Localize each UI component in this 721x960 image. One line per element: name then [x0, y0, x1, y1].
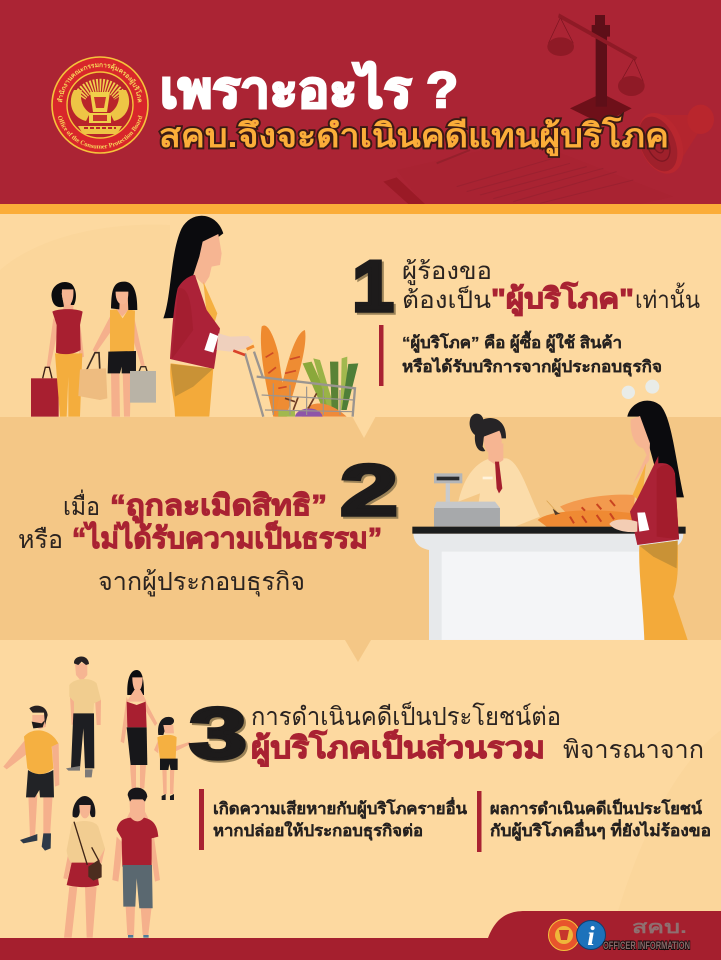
logo: Office of the Consumer Protection Board seal — [51, 56, 149, 154]
heading 1 — [402, 258, 700, 316]
illustration: shoppers with bags — [31, 216, 358, 417]
child — [154, 717, 191, 800]
text: definition of consumer: หรือได้รับบริการจากผู้ประกอบธุรกิจ — [402, 357, 662, 378]
heading 3: การดำเนินคดีเป็นประโยชน์ต่อ — [251, 701, 561, 731]
heading 3: พิจารณาจาก — [563, 736, 704, 764]
logo: Office of the Consumer Protection Board seal: สำนักงานคณะกรรมการคุ้มครองผู้บริโภค — [57, 63, 142, 102]
cash register — [434, 473, 500, 527]
footer logo: information icon: i — [587, 921, 595, 951]
text: section 2 — [18, 489, 382, 597]
illustration: group of consumers — [3, 657, 191, 938]
text: benefit to other consumers — [490, 797, 711, 842]
text: definition of consumer — [402, 330, 662, 378]
shopper with cart — [163, 216, 253, 417]
documents — [383, 140, 673, 204]
man in red t-shirt and grey shorts — [112, 788, 160, 938]
divider bar right — [477, 791, 482, 852]
damaged bread on counter — [538, 495, 637, 527]
text: benefit to other consumers: กับผู้บริโภคอื่นๆ ที่ยังไม่ร้องขอ — [490, 819, 711, 842]
divider bar left — [199, 789, 204, 850]
shopper in red shirt — [31, 282, 84, 417]
illustration: cashier counter scene — [412, 380, 688, 640]
footer logo: seal — [548, 920, 580, 950]
text: benefit to other consumers: ผลการดำเนินคดีเป็นประโยชน์ — [490, 797, 702, 818]
heading 1: "ผู้บริโภค" — [491, 281, 634, 316]
heading 3 — [251, 701, 704, 767]
logo: Office of the Consumer Protection Board seal: Office of the Consumer Protection Board — [58, 115, 142, 149]
pointer: section 2 to 3 — [345, 640, 371, 662]
text: harm to other consumers — [213, 797, 467, 841]
heading 1: ผู้ร้องขอ — [402, 258, 492, 286]
footer logo: information icon — [576, 920, 606, 951]
footer band — [0, 911, 721, 960]
text: harm to other consumers: เกิดความเสียหายกับผู้บริโภครายอื่น — [213, 797, 467, 820]
upset customer — [609, 380, 688, 640]
icon: scales of justice — [547, 13, 645, 124]
footer label: agency abbreviation: สคบ. — [632, 917, 687, 937]
text: definition of consumer: “ผู้บริโภค” คือ ผู้ซื้อ ผู้ใช้ สินค้า — [402, 330, 622, 354]
heading 1: ต้องเป็น — [402, 285, 491, 314]
man in beige shirt and black trousers — [66, 657, 101, 777]
text: section 2: หรือ — [18, 526, 63, 554]
bread and vegetables in cart — [261, 326, 358, 417]
heading 1: เท่านั้น — [635, 282, 700, 314]
text: section 2: เมื่อ — [63, 489, 100, 521]
subtitle: สคบ.จึงจะดำเนินคดีแทนผู้บริโภค — [159, 116, 669, 157]
woman with crossbody bag — [63, 796, 105, 938]
text: section 2: “ถูกละเมิดสิทธิ” — [110, 490, 327, 523]
number 2: 2 — [340, 451, 398, 531]
icon: rubber stamp — [630, 105, 714, 180]
number 1: 1 — [352, 247, 394, 327]
cashier — [458, 414, 540, 527]
counter — [412, 527, 686, 640]
text: harm to other consumers: หากปล่อยให้ประกอบธุรกิจต่อ — [213, 821, 423, 841]
man with beard — [3, 706, 59, 851]
title: เพราะอะไร ? — [160, 61, 458, 118]
heading 3: ผู้บริโภคเป็นส่วนรวม — [251, 729, 545, 767]
woman in red top and black skirt — [121, 670, 157, 788]
header background illustration: scales, stamp, documents — [383, 13, 714, 204]
number 3: 3 — [189, 694, 247, 774]
text: section 2: จากผู้ประกอบธุรกิจ — [98, 568, 305, 597]
shopper in yellow top — [78, 282, 156, 417]
text: section 2: “ไม่ได้รับความเป็นธรรม” — [72, 520, 382, 555]
divider bar 1 — [379, 325, 384, 386]
pointer: section 1 to 2 — [352, 416, 376, 438]
shopping cart — [233, 346, 355, 417]
